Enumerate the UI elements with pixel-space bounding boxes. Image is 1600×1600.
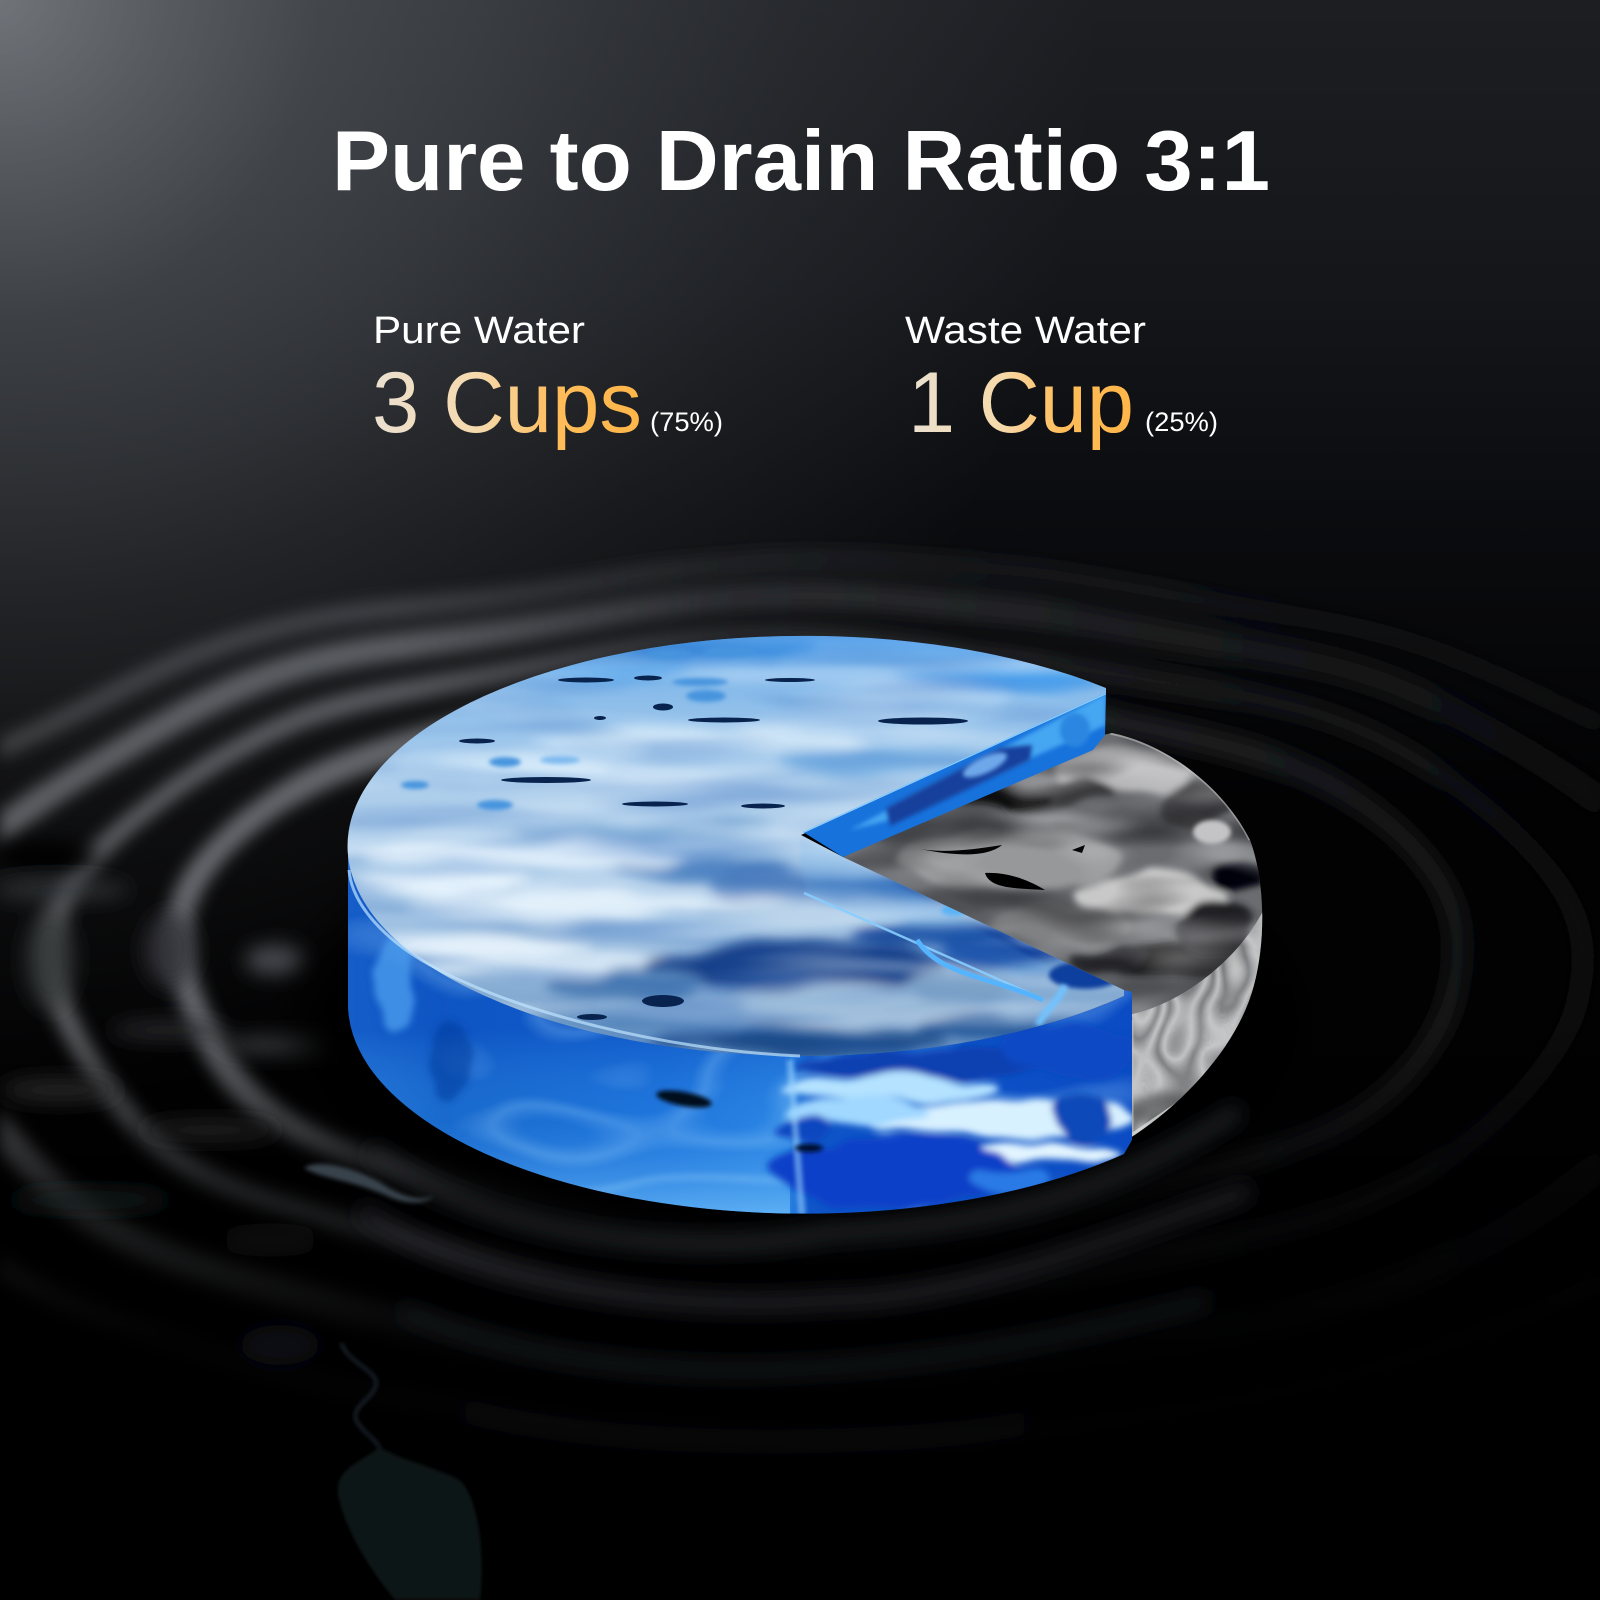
pie chart: blue pure water side wall (340, 840, 1140, 1230)
stat: pure water: (75%) (650, 407, 723, 437)
pie chart: blue pure water top surface (340, 630, 1140, 1060)
reflections on the water below the pie (304, 1110, 1250, 1600)
title: Pure to Drain Ratio 3:1 (332, 114, 1270, 209)
pie chart: front edge highlight (349, 870, 800, 1056)
stat: waste water: Waste Water (905, 310, 1146, 352)
fade of ripples toward the bottom (0, 1020, 1600, 1600)
stat: waste water (905, 310, 1218, 451)
stat: pure water: Pure Water (373, 310, 585, 352)
stat: waste water: (25%) (1145, 407, 1218, 437)
stat: waste water: 1 Cup (908, 355, 1134, 451)
pie chart: grey waste water 25% slice (840, 730, 1270, 1150)
dark pool under the pie (300, 793, 1300, 1257)
pie chart: notch inner wall (800, 690, 1110, 860)
lower-left ripple patches (0, 841, 340, 1365)
stat: pure water (372, 310, 723, 451)
stat: pure water: 3 Cups (372, 355, 642, 451)
water ripples (0, 565, 1600, 1437)
